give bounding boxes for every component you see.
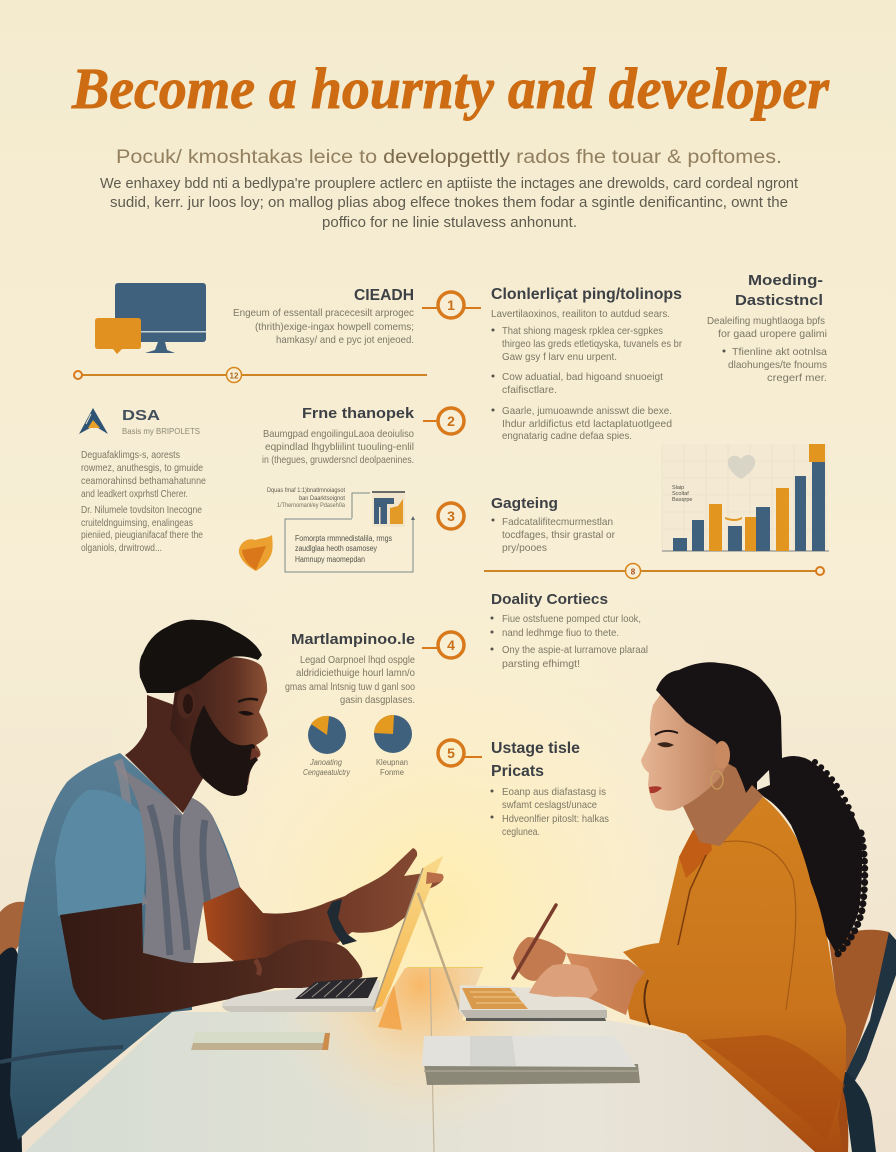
woman arms and hands [513,937,645,1015]
section: CIEADH: (thrith)exige-ingax howpell comems; [255,321,414,333]
section: Gagteing [491,495,615,554]
section: Frne thanopek: eqpindlad lhgybliilint tuouling-enlil [265,441,414,453]
step marker 2: 2 [447,413,455,429]
woman neck and face [641,690,763,846]
bullet list: cfaifisctlare. [502,384,557,396]
section: Moeding Dasticsmd: Moeding- [748,272,823,289]
logo block: DSA: Dr. Nilumele tovdsiton Inecogne [81,504,202,516]
section: Frne thanopek: Baumgpad engoilinguLaoa deoiuliso [263,428,414,440]
flow diagram: Fomorpta rmmnedistalila, rmgs [295,534,392,543]
section: Frne thanopek [262,405,415,466]
logo block: DSA: Basis my BRIPOLETS [122,426,200,436]
central timeline [407,268,483,968]
section: Moeding Dasticsmd: dlaohunges/te fnoums [728,359,827,371]
section: Doality Cortiecs: parsting efhimgt! [502,658,580,670]
title: Become a hournty and developer [71,56,829,121]
section: Clonlerliçat ping/tolinops: Lavertilaoxinos, reailiton to autdud sears. [491,308,670,320]
section: Martlampinoo.le: gmas amal lntsnig tuw d ganl soo [285,681,415,693]
flow diagram: Hamnupy maomepdan [295,555,365,564]
icon: orange heart [239,535,273,571]
section: CIEADH: CIEADH [354,287,414,304]
bullet list: Ihdur arldifictus etd lactaplatuotlgeed [502,418,672,430]
icon: grey heart [728,455,755,479]
logo block: DSA [79,408,206,554]
divider with badge, left: 12 [230,372,239,380]
section: Doality Cortiecs: Fiue ostsfuene pomped ctur look, [502,613,641,625]
section: Ustage tisle Pricats [490,740,609,838]
section: Frne thanopek: Frne thanopek [302,405,415,422]
step marker 5 [438,740,464,766]
hand thumb over screen [426,872,444,884]
bullet list [492,325,682,442]
flow diagram: 1/Thernomanl/ey Pdaseh0a [277,502,345,509]
intro paragraph: poffico for ne linie stulavess anhonunt. [322,215,577,231]
logo block: DSA: cruiteldnguimsing, enalingeas [81,517,193,529]
step marker 1: 1 [447,297,455,313]
section: Martlampinoo.le: Legad Oarpnoel lhqd ospgle [300,654,415,666]
earring [711,771,723,789]
pie chart: right: Fonme [380,768,405,777]
section: CIEADH: hamkasy/ and e pyc jot enjeoed. [276,334,414,346]
wristwatch [327,899,357,945]
intro paragraph: We enhaxey bdd nti a bedlypa're prouplere actlerc en aptiiste the inctages ane drewolds, card cordeal ngront [100,176,798,192]
section: Doality Cortiecs [490,591,648,670]
section: CIEADH: Engeum of essentall pracecesilt arprogec [233,307,414,319]
step marker 1 [438,292,464,318]
bar chart: Scoltaf [672,491,689,497]
logo block: DSA: Deguafaklimgs-s, aorests [81,449,180,461]
section: Martlampinoo.le: Martlampinoo.le [291,631,415,648]
section: Doality Cortiecs: Ony the aspie-at lurramove plaraal [502,644,648,656]
flow diagram: zaudlglaa heoth osamosey [295,544,377,553]
pen [513,905,556,978]
step marker 5: 5 [447,745,455,761]
section: Moeding Dasticsmd: cregerf mer. [767,372,827,384]
divider with badge, right [484,564,824,578]
bullet list: Gaarle, jumuoawnde anisswt die bexe. [502,405,672,417]
logo block: DSA: olganiols, drwitrowd... [81,542,162,554]
section: Martlampinoo.le: aldridiciethuige hourl lamn/o [296,667,415,679]
logo block: DSA: DSA [122,408,161,424]
laptop: man's [222,856,444,1012]
divider with badge, left [74,368,427,382]
woman shirt [623,797,846,1152]
chair: right [729,930,896,1152]
section: Clonlerliçat ping/tolinops: Clonlerliçat ping/tolinops [491,286,682,303]
pie chart: right [374,715,412,777]
intro paragraph [100,176,798,231]
step marker 4: 4 [447,637,455,653]
bullet list: thirgeo las greds etletiqyska, tuvanels es br [502,338,682,350]
man near arm and hand [60,903,362,1020]
phone on table [191,1032,330,1050]
section: Moeding Dasticsmd: Dasticstncl [735,292,823,309]
chair: left [0,902,25,1152]
section: Gagteing: pry/pooes [502,542,547,554]
logo block: DSA: and leadkert oxprhstl Cherer. [81,488,188,500]
bullet list: That shiong magesk rpklea cer-sgpkes [502,325,663,337]
notebook on table [422,1036,640,1085]
step marker 3 [438,503,464,529]
step marker 3: 3 [447,508,455,524]
section: Ustage tisle Pricats: ceglunea. [502,826,540,838]
man torso and t-shirt [0,753,240,1140]
section: Ustage tisle Pricats: Eoanp aus diafastasg is [502,786,606,798]
flow diagram: ban Daarktsoignot [299,495,345,502]
section: Ustage tisle Pricats: Pricats [491,763,544,780]
section: Doality Cortiecs: nand ledhmge fiuo to thete. [502,627,619,639]
section: CIEADH [233,287,414,346]
bullet list: engnatarig cadne defaa spies. [502,430,632,442]
subtitle: Pocuk/ kmoshtakas leice to developgettly rados fhe touar & poftomes. [116,147,782,168]
logo block: DSA: pieniied, pieugianifacaf there the [81,529,203,541]
bar chart [662,444,829,551]
man far arm and hand [203,848,443,962]
logo block: DSA: ceamorahinsd bethamahatunne [81,475,206,487]
man head [139,620,268,796]
pie chart: left: Cengaeatulctry [303,768,351,777]
section: Moeding Dasticsmd: Dealeifing mughtlaoga bpfs [707,315,825,327]
section: Moeding Dasticsmd: for gaad uropere galimi [718,328,827,340]
divider with badge, right: 8 [631,568,636,576]
man neck [125,695,215,813]
bullet list: Cow aduatial, bad higoand snuoeigt [502,371,663,383]
section: Gagteing: Fadcatalifitecmurmestlan [502,516,613,528]
step marker 2 [438,408,464,434]
icon: monitor with chat bubble [95,283,206,354]
bullet list: Gaw gsy f larv enu urpent. [502,351,617,363]
woman hair and ponytail [656,662,865,957]
person: woman writing [513,662,865,1152]
bar chart: Slaip [672,485,684,491]
pie chart: left: Janoating [309,758,343,767]
flow diagram [267,487,415,572]
table [25,968,826,1152]
section: Gagteing: tocdfages, thsir grastal or [502,529,615,541]
section: Clonlerliçat ping/tolinops [491,286,682,442]
pie chart: left [303,716,351,777]
laptop: woman's [418,893,607,1021]
logo block: DSA: rowmez, anuthesgis, to gmuide [81,462,203,474]
section: Martlampinoo.le [285,631,415,706]
section: Frne thanopek: in (thegues, gruwdersncl deolpaenines. [262,454,414,466]
bar chart: Basqrpe [672,497,692,503]
person: man at laptop [0,620,443,1140]
section: Moeding Dasticsmd [707,272,827,384]
flow diagram: Dquas fmaf 1:1)bnatlmnoiagsot [267,487,345,494]
section: Ustage tisle Pricats: Ustage tisle [491,740,580,757]
step marker 4 [438,632,464,658]
section: Gagteing: Gagteing [491,495,558,512]
icon: DSA triangle logo [79,408,108,434]
section: Doality Cortiecs: Doality Cortiecs [491,591,608,608]
section: Martlampinoo.le: gasin dasgplases. [340,694,415,706]
pie chart: right: Kleupnan [376,758,408,767]
section: Ustage tisle Pricats: swfamt ceslagst/unace [502,799,597,811]
section: Ustage tisle Pricats: Hdveonlfier pitoslt: halkas [502,813,609,825]
section: Moeding Dasticsmd: Tfienline akt ootnlsa [732,346,827,358]
icon: mini chart card [372,491,405,527]
intro paragraph: sudid, kerr. jur loos loy; on mallog plias abog elfece tnokes them fodar a sgintle denificantinc, ownt the [110,195,788,211]
